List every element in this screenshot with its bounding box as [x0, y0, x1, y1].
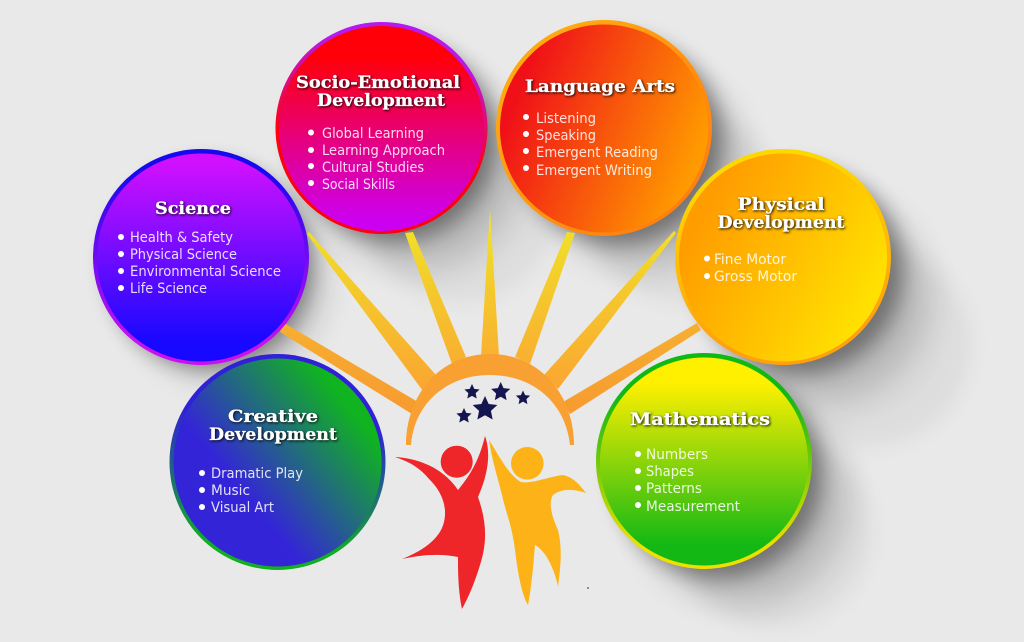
list: motor skills: Fine Motor — [714, 252, 786, 268]
list: language skills: Emergent Reading — [536, 145, 658, 161]
list: socio-emotional skills: Social Skills — [322, 177, 395, 193]
panel: physical development — [675, 149, 891, 365]
list: science topics: Environmental Science — [130, 264, 281, 280]
stars — [456, 382, 530, 422]
heading: physical development: Physical — [738, 195, 824, 214]
heading: creative development — [209, 407, 337, 444]
list: language skills: Speaking — [536, 128, 596, 144]
list: creative arts: Dramatic Play — [211, 466, 303, 482]
list: socio-emotional skills: Cultural Studies — [322, 160, 424, 176]
list: math topics: Numbers — [646, 447, 708, 463]
panel: socio-emotional development — [276, 22, 488, 234]
list: creative arts: Music — [211, 483, 250, 499]
heading: science: Science — [155, 199, 231, 218]
list: creative arts: Visual Art — [211, 500, 274, 516]
heading: language arts: Language Arts — [525, 77, 675, 96]
heading: creative development: Development — [209, 425, 337, 444]
list: socio-emotional skills: Learning Approach — [322, 143, 445, 159]
list: language skills — [523, 111, 658, 179]
list: socio-emotional skills — [308, 126, 445, 193]
list: math topics — [635, 447, 740, 515]
heading: socio-emotional development — [296, 73, 460, 110]
heading: mathematics: Mathematics — [630, 410, 770, 429]
red figure — [395, 436, 488, 609]
list: motor skills — [704, 252, 797, 285]
list: motor skills: Gross Motor — [714, 269, 797, 285]
list: science topics — [118, 230, 281, 297]
panel: mathematics — [596, 353, 812, 569]
list: math topics: Patterns — [646, 481, 702, 497]
panel: creative development — [170, 354, 386, 570]
list: science topics: Physical Science — [130, 247, 237, 263]
heading: socio-emotional development: Development — [317, 91, 445, 110]
heading: physical development — [718, 195, 845, 232]
sun rays — [280, 209, 701, 414]
list: creative arts — [199, 466, 303, 516]
panel: science — [93, 149, 309, 365]
sun arc — [406, 354, 574, 445]
panel: language arts — [496, 20, 712, 236]
list: math topics: Measurement — [646, 499, 740, 515]
heading: physical development: Development — [718, 213, 845, 232]
list: science topics: Health & Safety — [130, 230, 233, 246]
heading: creative development: Creative — [228, 407, 318, 426]
list: science topics: Life Science — [130, 281, 207, 297]
heading: socio-emotional development: Socio-Emotional — [296, 73, 460, 92]
yellow figure — [489, 440, 586, 605]
list: language skills: Listening — [536, 111, 596, 127]
list: socio-emotional skills: Global Learning — [322, 126, 424, 142]
list: language skills: Emergent Writing — [536, 163, 652, 179]
list: math topics: Shapes — [646, 464, 694, 480]
